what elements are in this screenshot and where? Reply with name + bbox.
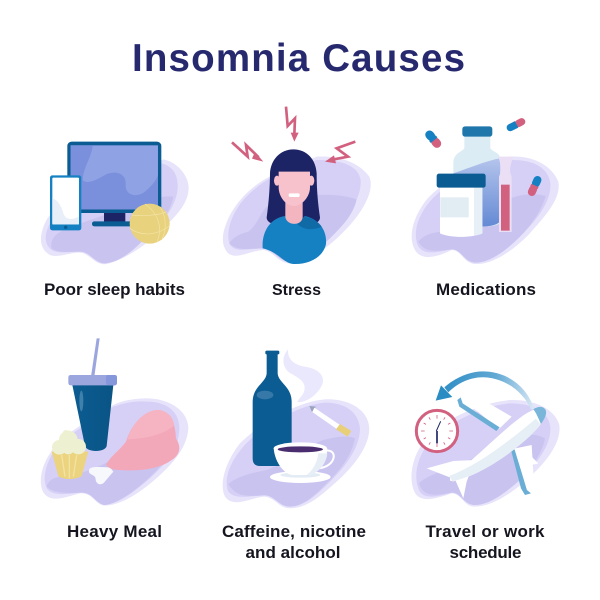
icon: lightning arrows bbox=[232, 107, 355, 163]
labels: Caffeine, nicotine bbox=[222, 522, 366, 541]
panel: travel or work schedule bbox=[411, 371, 560, 562]
label: Stress bbox=[272, 282, 321, 299]
icon: stressed woman bbox=[263, 149, 326, 264]
background blob bbox=[223, 399, 369, 508]
panel: caffeine, nicotine and alcohol bbox=[222, 349, 369, 562]
icon: large bottle bbox=[453, 126, 500, 227]
panel: poor sleep habits bbox=[41, 142, 189, 299]
title: Insomnia Causes bbox=[132, 37, 465, 80]
icon: cupcake bbox=[52, 430, 88, 479]
icon: cigarette bbox=[309, 406, 351, 437]
background blob bbox=[411, 400, 560, 507]
icon: computer monitor bbox=[67, 142, 161, 226]
background blob bbox=[41, 159, 189, 264]
icon: chicken leg bbox=[89, 410, 179, 484]
panel: travel or work schedule: schedule bbox=[450, 543, 522, 562]
icon: airplane bbox=[427, 397, 546, 498]
panel: caffeine, nicotine and alcohol: and alcohol bbox=[246, 543, 340, 562]
icon: coffee cup bbox=[270, 442, 334, 483]
label: Poor sleep habits bbox=[44, 280, 185, 299]
background blob bbox=[223, 156, 371, 263]
label: Medications bbox=[436, 280, 536, 299]
panel: medications bbox=[412, 117, 559, 299]
icon: phone bbox=[50, 175, 81, 230]
icon: ampoule bbox=[498, 157, 513, 232]
label: Heavy Meal bbox=[67, 522, 162, 541]
panel: stress bbox=[223, 107, 371, 299]
icon: basketball bbox=[130, 204, 170, 244]
icon: smoke bbox=[283, 349, 323, 402]
icon: cup with straw bbox=[68, 338, 117, 451]
panel: heavy meal bbox=[41, 338, 188, 541]
icon: pills bbox=[423, 117, 543, 197]
icon: bottle bbox=[253, 351, 292, 466]
background blob bbox=[412, 156, 559, 264]
icon: white jar bbox=[437, 174, 486, 237]
background blob bbox=[41, 398, 188, 506]
icon: curved arrow bbox=[436, 371, 534, 409]
icon: wall clock bbox=[416, 410, 458, 452]
labels: Travel or work bbox=[426, 522, 545, 541]
